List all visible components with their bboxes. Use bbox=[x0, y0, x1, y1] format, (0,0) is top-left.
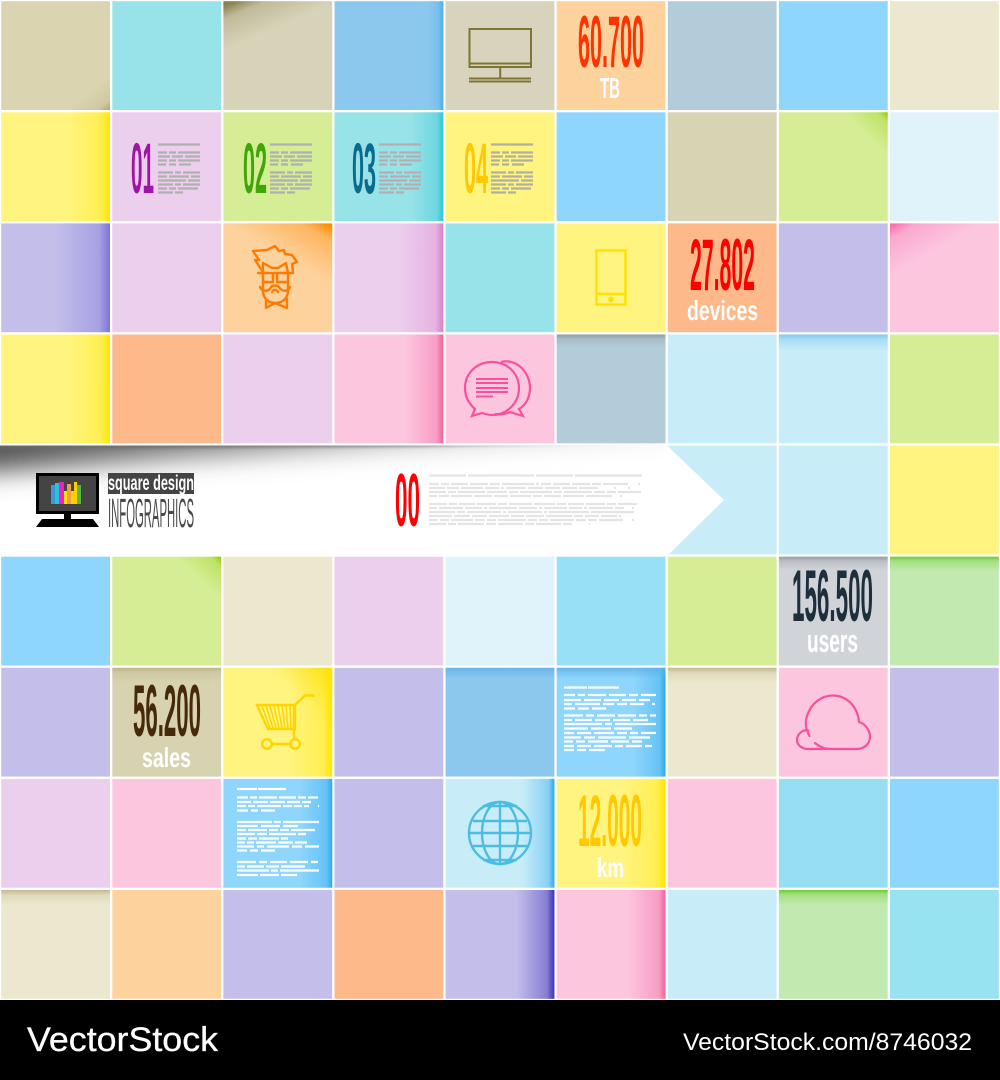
stat: 27.802 devices: devices bbox=[687, 295, 758, 326]
icon: globe bbox=[469, 802, 531, 864]
footer bar: VectorStock.com/8746032 bbox=[683, 1029, 972, 1056]
text block: white lines on blue bbox=[237, 789, 319, 875]
stat: 156.500 users: users bbox=[807, 623, 858, 659]
logo icon: black monitor with color bars bbox=[36, 473, 99, 527]
step 01 with text lines: 01 bbox=[131, 130, 154, 209]
icon: shopping cart bbox=[257, 696, 314, 749]
step 02 with text lines: 02 bbox=[243, 130, 267, 209]
stat: 56.200 sales bbox=[133, 671, 201, 773]
icon: hipster face bbox=[253, 246, 297, 308]
stat: 60.700 TB: TB bbox=[600, 73, 620, 105]
stat: 27.802 devices bbox=[687, 225, 758, 326]
center arrow ribbon bbox=[0, 446, 724, 554]
footer bar: VectorStock bbox=[27, 1021, 219, 1059]
logo wordmark: square design infographics bbox=[108, 472, 194, 536]
text: 56.200 bbox=[133, 671, 201, 752]
text: INFOGRAPHICS bbox=[108, 490, 194, 536]
stat: 56.200 sales: sales bbox=[142, 742, 191, 773]
icon: monitor bbox=[469, 29, 531, 82]
text block: white lines on blue bbox=[564, 688, 656, 750]
step 04 with text lines: 04 bbox=[464, 130, 488, 209]
stat: 12.000 km bbox=[578, 781, 642, 883]
icon: cloud bbox=[797, 696, 870, 749]
step 03 with text lines: 03 bbox=[352, 130, 376, 209]
icon: speech bubbles bbox=[465, 361, 530, 416]
text: 12.000 bbox=[578, 781, 642, 862]
text: 60.700 bbox=[578, 2, 644, 83]
icon: smartphone bbox=[596, 250, 626, 304]
stat: 60.700 TB bbox=[578, 2, 644, 105]
footer bar bbox=[0, 1000, 1000, 1080]
stat: 156.500 users bbox=[792, 556, 873, 659]
step 00 with text lines: 00 bbox=[395, 458, 420, 542]
logo wordmark: square design infographics: square design bbox=[108, 472, 194, 495]
text: 27.802 bbox=[690, 225, 755, 306]
stat: 12.000 km: km bbox=[597, 852, 624, 883]
